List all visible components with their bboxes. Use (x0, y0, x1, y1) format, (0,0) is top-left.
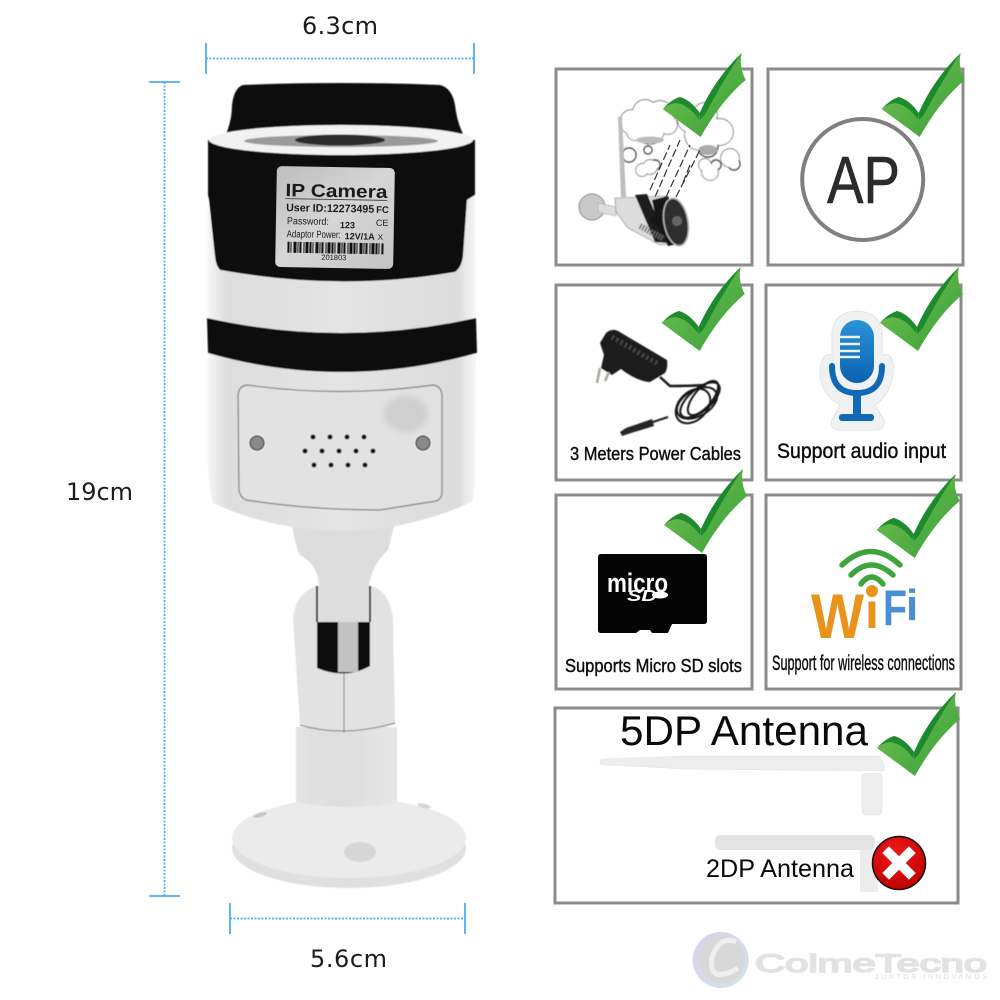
sticker text: Adaptor Power: (287, 229, 341, 241)
panel: weatherproof (556, 53, 752, 265)
camera upper black band (208, 140, 475, 282)
camera speaker cover (238, 385, 442, 510)
camera product photo (207, 83, 477, 888)
check mark (662, 267, 745, 351)
base disc (232, 798, 466, 888)
icon: micro SD card: micro (607, 568, 668, 598)
caption: Supports Micro SD slots (565, 656, 742, 676)
camera white ring and lens (209, 125, 473, 155)
check mark (663, 53, 746, 137)
icon: rain clouds (620, 100, 740, 180)
icon: power adapter (597, 330, 725, 436)
check mark (882, 53, 965, 137)
sticker text: 201803 (321, 253, 346, 262)
check mark (880, 267, 963, 351)
heading: 5DP antenna: 5DP Antenna (620, 707, 869, 754)
icon: 2DP antenna (715, 835, 878, 892)
camera lower black band (207, 318, 477, 372)
icon: 5DP antenna (600, 756, 884, 815)
dimension: height 19cm (66, 82, 180, 896)
sticker text: IP Camera (285, 180, 389, 202)
label: 2DP antenna: 2DP Antenna (706, 855, 854, 883)
neck (290, 515, 397, 622)
icon: wifi logo: F (883, 580, 907, 636)
dimension: top width 6.3cm (206, 12, 474, 74)
sticker text: 12V/1A (345, 231, 375, 242)
logo wordmark: ColmeTecno (755, 950, 987, 978)
icon: wifi logo: i (865, 583, 879, 639)
panel: micro SD (556, 469, 752, 689)
speaker holes (302, 434, 376, 468)
panel: wifi (766, 474, 961, 689)
sticker text: User ID:12273495 (286, 202, 374, 216)
camera sticker label (275, 166, 395, 269)
logo emblem (693, 932, 749, 988)
panel: AP mode (768, 53, 965, 265)
screws (248, 434, 432, 452)
sticker text (284, 180, 389, 263)
watermark logo (693, 932, 987, 988)
mount column (296, 727, 397, 807)
camera hood (226, 83, 463, 134)
icon: wifi logo: W (811, 582, 864, 652)
logo tagline: JUNTOS INNOVAMOS (875, 974, 987, 981)
panel: antenna comparison (555, 692, 960, 903)
icon: micro SD card: SD (627, 588, 658, 605)
swivel joint slot (317, 586, 370, 674)
icon: micro SD card (598, 554, 707, 633)
sticker text: X (378, 233, 384, 242)
check mark (664, 469, 747, 553)
icon: AP circle (802, 119, 923, 240)
sticker text: CE (376, 218, 389, 228)
camera white body (208, 195, 476, 531)
swivel arm (293, 586, 395, 732)
check mark (877, 474, 960, 558)
check mark (877, 692, 960, 776)
caption: Support audio input (777, 440, 946, 463)
dimension: height 19cm: 19cm (66, 478, 133, 506)
sticker text: Password: (287, 216, 329, 228)
icon: outdoor camera (579, 117, 692, 248)
icon: wifi logo: i (906, 581, 918, 630)
caption: 3 Meters Power Cables (570, 444, 741, 464)
icon: rain streaks (650, 140, 700, 197)
dimension: base width 5.6cm: 5.6cm (310, 945, 387, 973)
sticker text: 123 (340, 220, 355, 230)
icon: red cross (872, 836, 926, 890)
icon: microphone (820, 311, 894, 430)
sticker text: FC (376, 205, 389, 216)
dimension: base width 5.6cm (230, 903, 465, 973)
panel: audio input (766, 267, 963, 480)
icon: AP circle: AP (827, 143, 900, 218)
icon: wifi logo (811, 552, 918, 652)
dimension: top width 6.3cm: 6.3cm (302, 12, 378, 40)
panel: power cable (556, 267, 752, 480)
